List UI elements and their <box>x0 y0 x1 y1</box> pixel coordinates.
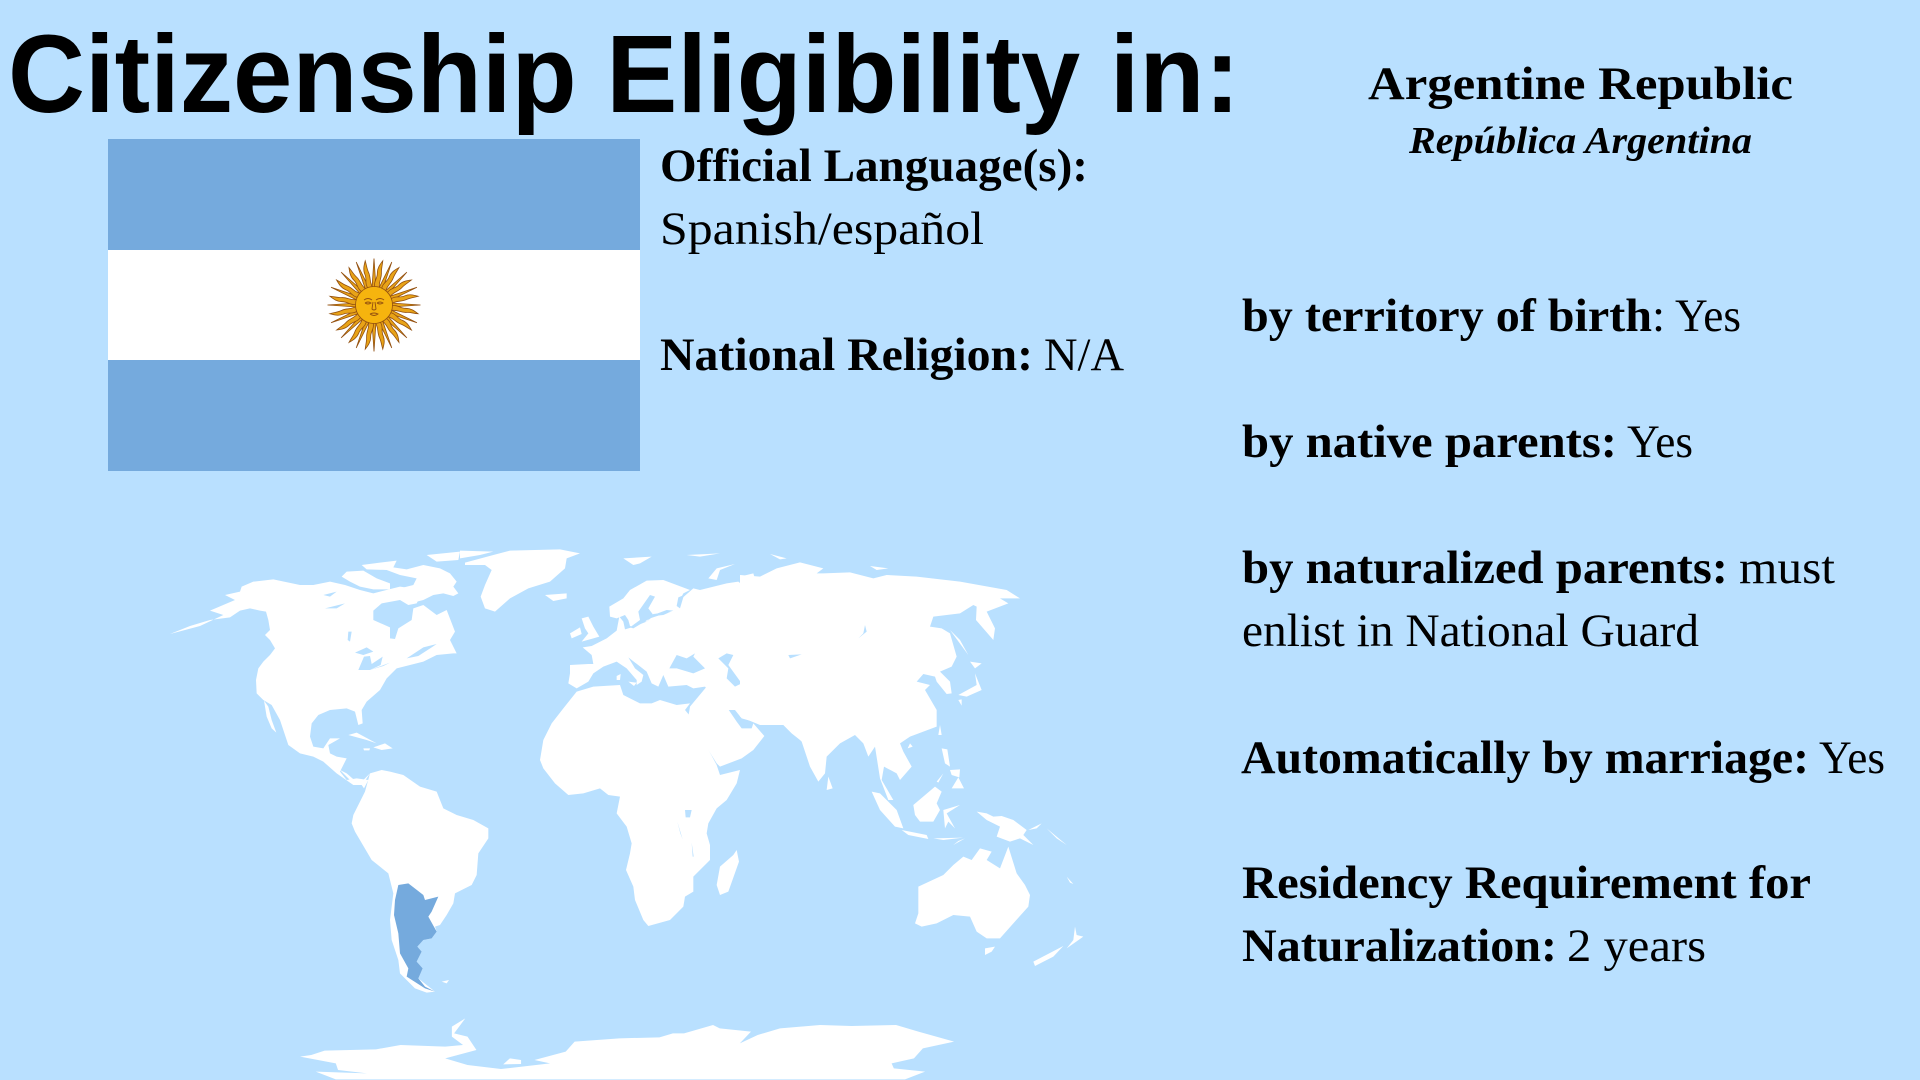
by native parents: by native parents: <box>1242 416 1617 468</box>
Southeast Asia and Oceania <box>872 787 1083 966</box>
residency requirement: Naturalization: <box>1242 920 1557 972</box>
national religion value: N/A <box>1044 329 1124 381</box>
automatically by marriage: Automatically by marriage: <box>1241 732 1809 784</box>
Africa and Arabia <box>540 685 764 926</box>
official language value: Spanish/español <box>660 203 984 255</box>
North American lakes and Gulf of St Lawrence <box>323 592 437 670</box>
language and religion text <box>660 140 1124 381</box>
world map <box>170 549 1083 1079</box>
official language label: Official Language(s): <box>660 140 1088 192</box>
Greenland and Arctic islands <box>460 549 735 686</box>
spanish name: República Argentina <box>1408 120 1752 162</box>
by naturalized parents: must <box>1739 542 1835 594</box>
South America <box>340 770 488 993</box>
North America <box>170 552 460 788</box>
by native parents: Yes <box>1627 416 1693 468</box>
icon: sun of May <box>328 258 420 352</box>
by territory of birth: Yes <box>1675 290 1741 342</box>
title: Citizenship Eligibility in: <box>8 13 1240 136</box>
residency requirement: 2 years <box>1567 920 1706 972</box>
Baikal and Balkhash lakes <box>788 625 867 658</box>
eligibility text <box>1241 290 1885 972</box>
by naturalized parents: enlist in National Guard <box>1242 605 1699 657</box>
eastern Asia <box>740 554 1020 800</box>
by naturalized parents <box>1242 542 1835 657</box>
African lakes <box>677 810 694 857</box>
by naturalized parents: by naturalized parents: <box>1242 542 1728 594</box>
by territory of birth: by territory of birth <box>1242 290 1652 342</box>
automatically by marriage: Yes <box>1819 732 1885 784</box>
highlighted country: Argentina <box>394 883 438 992</box>
residency requirement: Residency Requirement for <box>1242 857 1811 909</box>
Europe and western Asia <box>568 573 760 723</box>
Scandinavia <box>609 580 690 627</box>
country name <box>1368 58 1793 162</box>
Antarctica <box>300 1018 954 1079</box>
english name: Argentine Republic <box>1368 58 1793 110</box>
flag of Argentina <box>108 139 640 471</box>
by territory of birth: : <box>1652 290 1665 342</box>
residency requirement <box>1242 857 1811 972</box>
Baltic, White, Black and Caspian seas <box>630 578 755 687</box>
national religion label: National Religion: <box>660 329 1033 381</box>
